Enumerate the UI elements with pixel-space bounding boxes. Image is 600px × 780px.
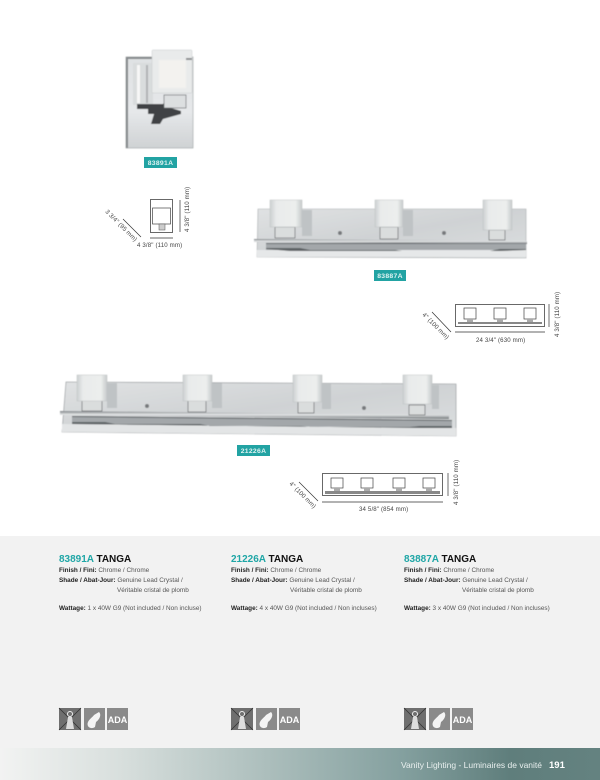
footer band — [0, 748, 600, 780]
specification panel background — [0, 536, 600, 749]
dimension drawing: 21226A: 34 5/8" (854 mm) — [359, 506, 408, 513]
spec block: 21226A: Véritable cristal de plomb — [290, 587, 362, 594]
spec block: 83891A: Finish / Fini: Chrome / Chrome — [59, 567, 150, 574]
dimension drawing: 21226A: 4" (100 mm) — [288, 480, 317, 510]
spec block: 21226A: 21226A TANGA — [231, 554, 303, 565]
dimension drawing: 83891A: 4 3/8" (110 mm) — [184, 187, 191, 232]
icons: 21226A certifications — [231, 708, 300, 730]
icons: 83887A certifications — [404, 708, 473, 730]
product photo: 83887A three-light bar — [254, 200, 527, 258]
spec block: 83891A: Shade / Abat-Jour: Genuine Lead Crystal / — [59, 577, 183, 584]
spec block: 83887A: 83887A TANGA — [404, 554, 476, 565]
dimension drawing: 21226A: 4 3/8" (110 mm) — [453, 460, 460, 505]
spec block: 83887A — [404, 554, 550, 612]
icons: 21226A certifications: ADA — [280, 715, 300, 725]
spec block: 21226A: Shade / Abat-Jour: Genuine Lead Crystal / — [231, 577, 355, 584]
page number: 191 — [549, 760, 566, 771]
spec block: 21226A: Wattage: 4 x 40W G9 (Not included / Non incluses) — [231, 605, 377, 612]
product photo: 21226A four-light bar — [60, 375, 456, 436]
dimension drawing: 83887A: 4" (100 mm) — [421, 311, 450, 341]
spec block: 83887A: Finish / Fini: Chrome / Chrome — [404, 567, 495, 574]
label: 83891A: 83891A — [148, 160, 173, 167]
spec block: 83891A: 83891A TANGA — [59, 554, 131, 565]
label: 21226A: 21226A — [241, 448, 266, 455]
spec block: 83891A — [59, 554, 202, 612]
spec block: 83891A: Wattage: 1 x 40W G9 (Not included / Non incluse) — [59, 605, 202, 612]
dimension drawing: 83887A: 24 3/4" (630 mm) — [476, 337, 525, 344]
icons: 83887A certifications: ADA — [453, 715, 473, 725]
spec block: 21226A — [231, 554, 377, 612]
icons: 83891A certifications: ADA — [108, 715, 128, 725]
dimension drawing: 83891A — [104, 187, 191, 249]
label: 21226A — [237, 445, 270, 456]
spec block: 83887A: Shade / Abat-Jour: Genuine Lead Crystal / — [404, 577, 528, 584]
dimension drawing: 83891A: 4 3/8" (110 mm) — [137, 242, 182, 249]
dimension drawing: 21226A — [288, 460, 460, 513]
label: 83887A: 83887A — [377, 273, 403, 280]
dimension drawing: 83887A — [421, 292, 561, 344]
label: 83891A — [144, 157, 177, 168]
spec block: 83891A: Véritable cristal de plomb — [117, 587, 189, 594]
footer section title: Vanity Lighting - Luminaires de vanité — [401, 760, 542, 770]
dimension drawing: 83891A: 3 3/4" (95 mm) — [104, 208, 138, 243]
spec block: 21226A: Finish / Fini: Chrome / Chrome — [231, 567, 322, 574]
spec block: 83887A: Véritable cristal de plomb — [462, 587, 534, 594]
dimension drawing: 83887A: 4 3/8" (110 mm) — [554, 292, 561, 337]
product photo: 83891A sconce — [126, 50, 193, 148]
label: 83887A — [374, 270, 406, 281]
spec block: 83887A: Wattage: 3 x 40W G9 (Not included / Non incluses) — [404, 605, 550, 612]
icons: 83891A certifications — [59, 708, 128, 730]
